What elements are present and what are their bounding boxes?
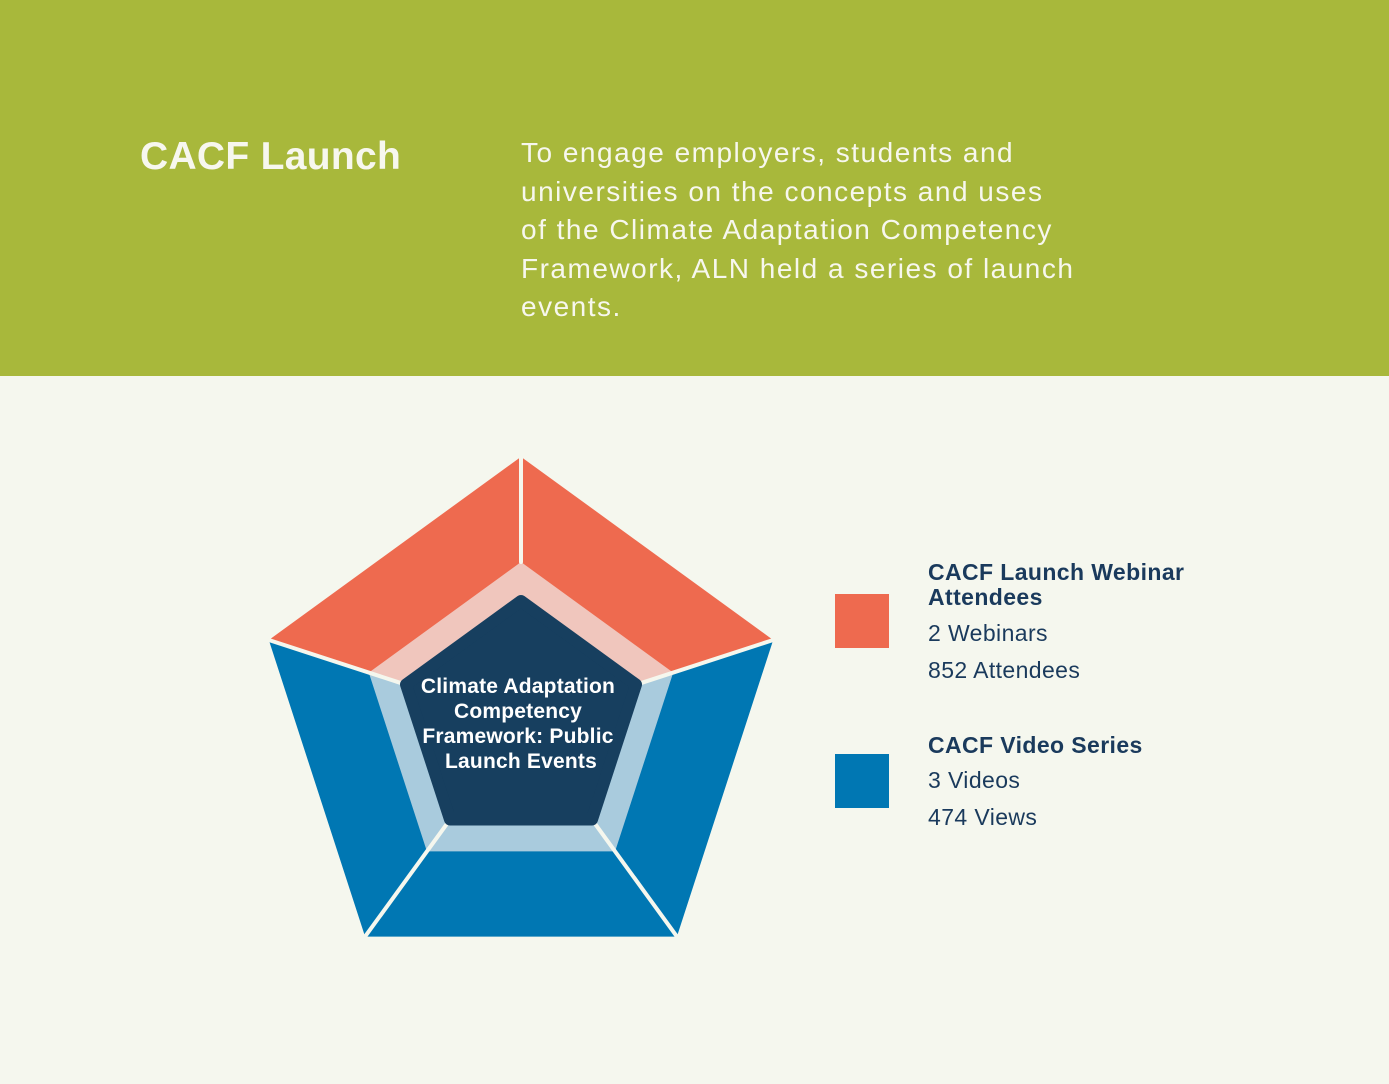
center label: Climate Adaptation xyxy=(421,675,615,698)
title: CACF Launch xyxy=(140,135,401,178)
segment: right blue xyxy=(615,640,772,936)
intro paragraph xyxy=(521,137,1074,322)
header band xyxy=(0,0,1389,376)
legend text: webinars: 852 Attendees xyxy=(928,657,1080,683)
center label: Framework: Public xyxy=(422,725,614,748)
center label: Competency xyxy=(454,700,582,723)
legend text: webinars: 2 Webinars xyxy=(928,620,1048,646)
intro paragraph: Framework, ALN held a series of launch xyxy=(521,253,1074,284)
intro paragraph: universities on the concepts and uses xyxy=(521,176,1043,207)
intro paragraph: of the Climate Adaptation Competency xyxy=(521,214,1053,245)
ring: pink top xyxy=(369,562,673,683)
legend text: videos: CACF Video Series xyxy=(928,732,1143,758)
segment: top-left orange xyxy=(270,458,521,673)
legend text: webinars: CACF Launch Webinar xyxy=(928,559,1184,585)
segment: bottom blue xyxy=(366,851,676,936)
legend text: videos: 3 Videos xyxy=(928,767,1020,793)
legend text: webinars: Attendees xyxy=(928,584,1043,610)
segment: left blue xyxy=(270,640,427,936)
legend swatch: blue xyxy=(835,754,889,808)
legend text: videos xyxy=(928,732,1143,830)
center label: Launch Events xyxy=(445,750,597,773)
intro paragraph: events. xyxy=(521,291,622,322)
ring: light blue lower xyxy=(369,673,673,851)
intro paragraph: To engage employers, students and xyxy=(521,137,1014,168)
segment: top-right orange xyxy=(521,458,772,673)
legend text: videos: 474 Views xyxy=(928,804,1037,830)
legend text: webinars xyxy=(928,559,1184,683)
legend swatch: orange xyxy=(835,594,889,648)
dividers xyxy=(270,458,772,936)
center dark pentagon xyxy=(406,601,636,820)
